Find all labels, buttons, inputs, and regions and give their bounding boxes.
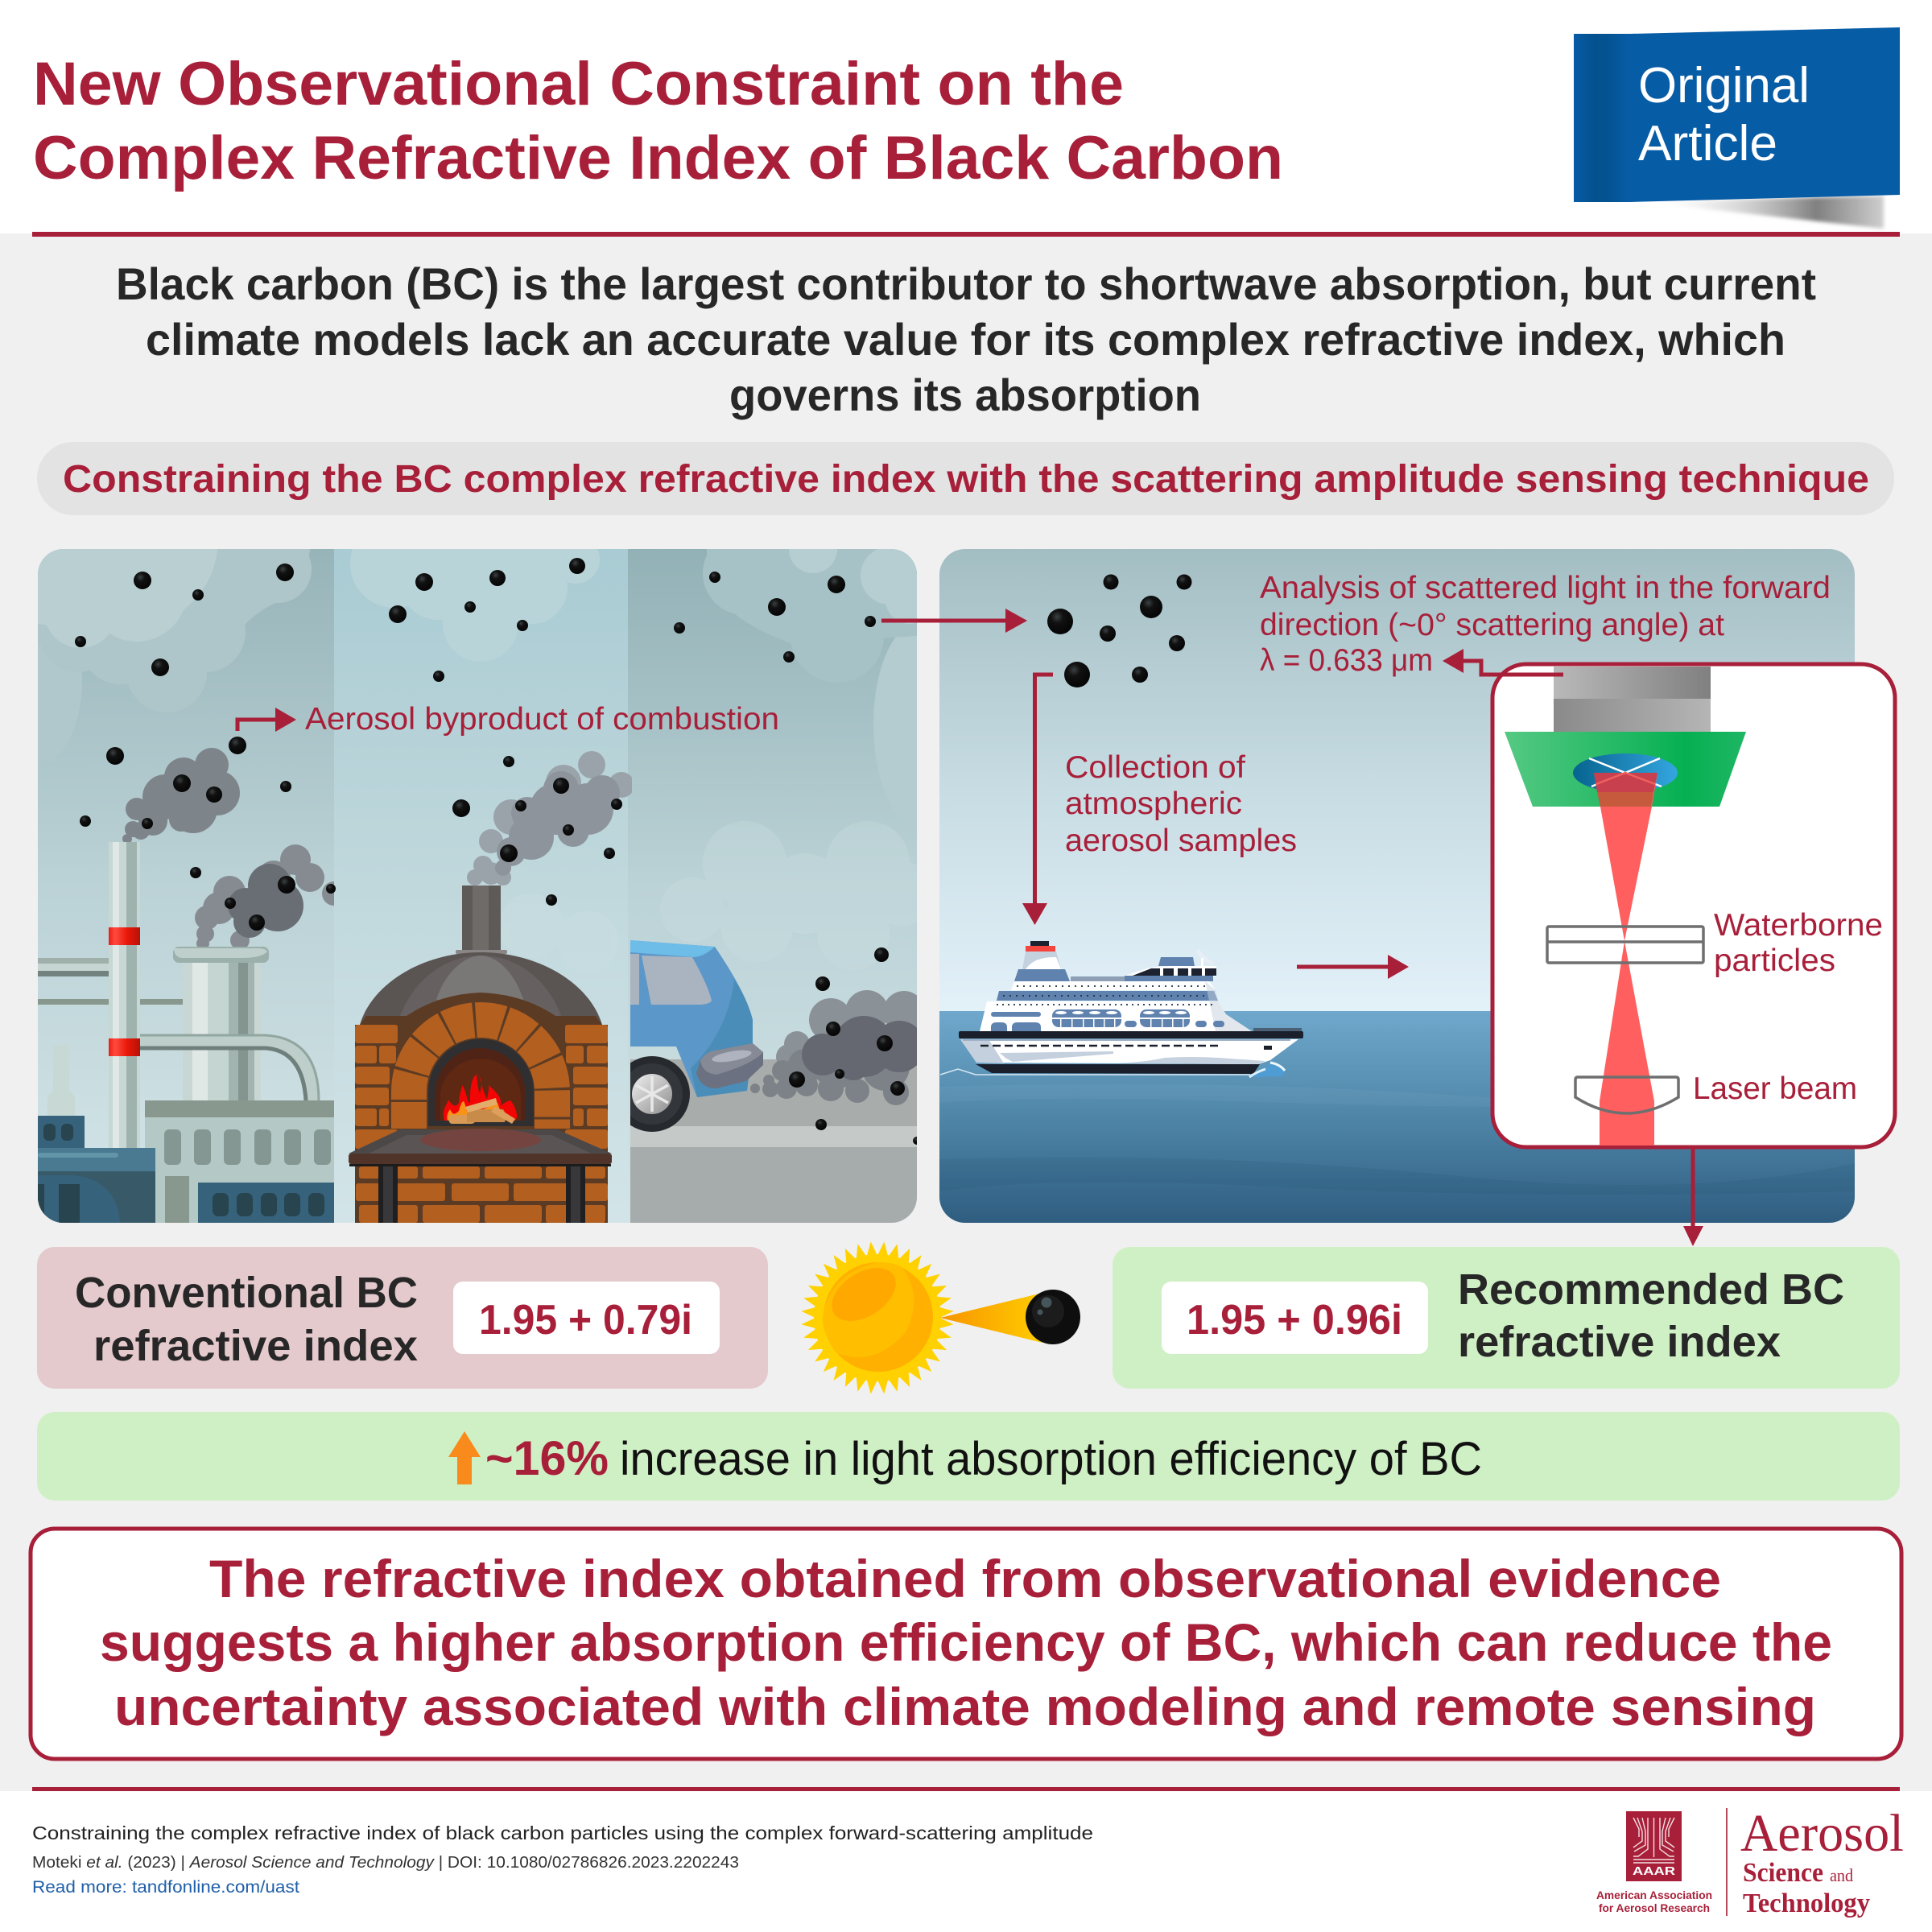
panel: atmospheric sampling on ship — [939, 549, 1855, 1223]
scene: oven — [334, 519, 634, 1223]
smoke: exhaust — [750, 990, 925, 1105]
sample cell — [1547, 927, 1703, 963]
panel: conventional refractive index: 1.95 + 0.79i — [479, 1297, 692, 1344]
logo: Aerosol Science and Technology: Science — [1743, 1858, 1823, 1888]
panel: absorption increase — [37, 1412, 1900, 1501]
panel: conventional refractive index: refractive index — [93, 1322, 418, 1370]
panel: conclusion: suggests a higher absorption efficiency of BC, which can reduce the — [100, 1612, 1832, 1672]
panel: conclusion — [31, 1529, 1901, 1759]
intro text: climate models lack an accurate value for its complex refractive index, which — [146, 314, 1785, 365]
green detector mount — [1505, 732, 1746, 807]
arrow: instrument to recommended — [1683, 1147, 1703, 1246]
intro text: Black carbon (BC) is the largest contributor to shortwave absorption, but current — [116, 258, 1816, 309]
arrow: ship to instrument — [1297, 955, 1409, 979]
factory buildings — [38, 1100, 334, 1223]
title — [33, 50, 1283, 192]
scene: road and car — [628, 549, 917, 1223]
label: waterborne particles — [1714, 908, 1883, 978]
arrow: emissions to sampling — [881, 609, 1027, 633]
panel: absorption increase: ~16% — [485, 1431, 609, 1485]
arrow: collection to ship — [1022, 675, 1053, 925]
small tank — [47, 1045, 75, 1116]
label: waterborne particles: particles — [1714, 943, 1835, 978]
oven flue — [456, 886, 507, 954]
text: collection of aerosol samples: atmospheric — [1065, 786, 1242, 821]
badge: original article ribbon — [1574, 27, 1900, 229]
text: analysis of scattered light: λ = 0.633 μm — [1260, 643, 1433, 678]
text: analysis of scattered light: Analysis of scattered light in the forward — [1260, 571, 1831, 605]
text: collection of aerosol samples — [1065, 750, 1297, 858]
panel: recommended refractive index: Recommended BC — [1458, 1265, 1844, 1314]
logo: AAAR: American Association — [1596, 1889, 1712, 1901]
panel: recommended refractive index: 1.95 + 0.96i — [1187, 1297, 1402, 1344]
subheading pill: Constraining the BC complex refractive index with the scattering amplitude sensing technique — [63, 458, 1869, 501]
smoke: oven — [467, 751, 634, 886]
scene: factory — [38, 549, 334, 1223]
badge: original article ribbon: Article — [1638, 116, 1777, 171]
pipes and silo — [38, 947, 319, 1100]
particles: emitted black carbon — [75, 558, 921, 1145]
blue detector — [1573, 753, 1678, 792]
logo: AAAR: AAAR — [1633, 1864, 1675, 1878]
title: Complex Refractive Index of Black Carbon — [33, 124, 1283, 192]
badge: original article ribbon: Original — [1638, 58, 1810, 114]
panel: absorption increase: increase in light absorption efficiency of BC — [620, 1433, 1482, 1485]
label: laser beam: Laser beam — [1693, 1071, 1857, 1106]
citation: Constraining the complex refractive index of black carbon particles using the complex forward-scattering amplitude — [32, 1823, 1093, 1843]
citation: Moteki et al. (2023) | Aerosol Science and Technology | DOI: 10.1080/02786826.2023.2202243 — [32, 1854, 739, 1872]
icon: fire and logs — [444, 1074, 517, 1124]
text: collection of aerosol samples: aerosol samples — [1065, 824, 1297, 858]
citation: Read more: tandfonline.com/uast — [32, 1878, 299, 1897]
logo: Aerosol Science and Technology: and — [1830, 1865, 1853, 1885]
smoke: chimney — [122, 748, 240, 844]
intro text — [116, 258, 1816, 420]
panel: sources of black carbon — [0, 519, 962, 1223]
icon: sun shining on black carbon — [801, 1241, 1080, 1394]
label: waterborne particles: Waterborne — [1714, 908, 1883, 943]
intro text: governs its absorption — [729, 369, 1201, 420]
oven brick body — [355, 993, 608, 1223]
title: New Observational Constraint on the — [33, 50, 1124, 118]
particles: collected aerosol — [1047, 575, 1191, 687]
lens — [1575, 1077, 1678, 1113]
panel: conclusion: The refractive index obtained from observational evidence — [209, 1549, 1721, 1608]
arrow: detector to analysis — [1443, 649, 1563, 675]
panel: conclusion: uncertainty associated with climate modeling and remote sensing — [114, 1677, 1816, 1736]
logo: Aerosol Science and Technology: Technology — [1743, 1889, 1870, 1918]
icon: ship — [940, 941, 1303, 1077]
logo: AAAR: for Aerosol Research — [1599, 1901, 1710, 1914]
panel: recommended refractive index: refractive index — [1458, 1318, 1781, 1366]
icon: car — [630, 940, 763, 1132]
chimney — [109, 842, 140, 1149]
smoke: silo — [195, 844, 334, 947]
logo: Aerosol Science and Technology: Aerosol — [1740, 1804, 1904, 1863]
icon: up arrow — [448, 1431, 481, 1484]
oven hood and table — [349, 1129, 612, 1223]
text: analysis of scattered light — [1260, 571, 1831, 678]
citation — [32, 1823, 1093, 1897]
label: aerosol byproduct: Aerosol byproduct of combustion — [305, 702, 779, 737]
panel: recommended refractive index — [1113, 1247, 1900, 1389]
text: analysis of scattered light: direction (~0° scattering angle) at — [1260, 608, 1724, 642]
panel: conventional refractive index: Conventional BC — [75, 1269, 418, 1317]
oven dome — [360, 952, 602, 1025]
sensor housing — [1554, 667, 1711, 732]
logo: Aerosol Science and Technology — [1740, 1804, 1904, 1918]
subheading pill — [37, 442, 1894, 515]
laser beam — [1594, 773, 1657, 1146]
text: collection of aerosol samples: Collection of — [1065, 750, 1245, 785]
logo: AAAR — [1596, 1811, 1712, 1914]
panel: instrument diagram — [1492, 664, 1895, 1147]
panel: conventional refractive index — [37, 1247, 768, 1389]
